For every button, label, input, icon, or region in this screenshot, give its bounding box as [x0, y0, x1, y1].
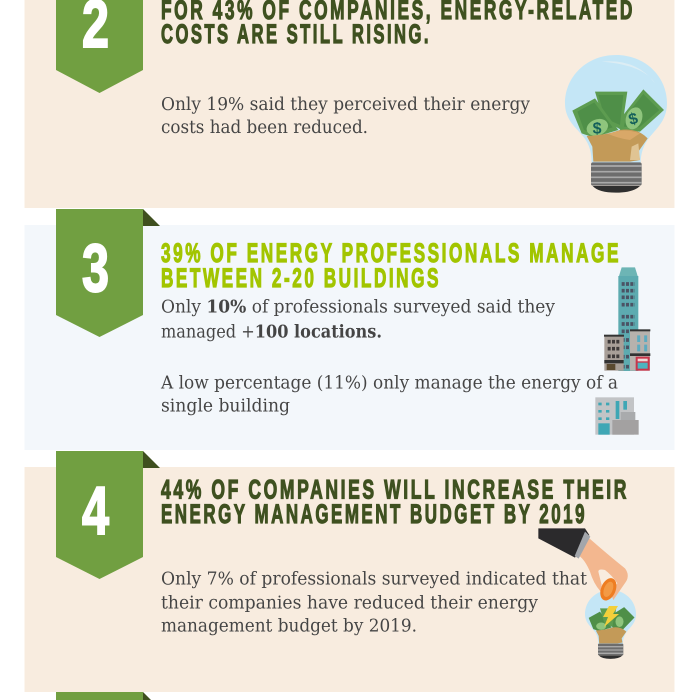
body text: locations: single building: [161, 396, 290, 416]
heading: rising costs: COSTS ARE STILL RISING.: [161, 19, 431, 49]
panel: buildings managed: [24, 209, 674, 450]
ribbon: next section: [56, 692, 160, 700]
body text: locations: [160, 298, 618, 416]
panel: rising costs: [24, 0, 674, 208]
body text: reduced budget: [161, 570, 587, 636]
body text: reduced budget: their companies have reduced their energy: [161, 594, 538, 614]
body text: reduced costs: Only 19% said they perceived their energy: [161, 95, 530, 115]
body text: reduced budget: management budget by 2019.: [161, 616, 417, 636]
heading: buildings managed: [161, 238, 621, 293]
icon: light bulb with money: [565, 55, 667, 193]
body text: reduced budget: Only 7% of professionals surveyed indicated that: [161, 570, 587, 590]
panel: budget: [24, 451, 674, 692]
body text: reduced costs: costs had been reduced.: [161, 118, 368, 138]
ribbon: number 3: 3: [82, 230, 109, 306]
icon: light bulb with money: $: [627, 110, 640, 129]
icon: light bulb with money: $: [593, 120, 602, 137]
heading: buildings managed: BETWEEN 2-20 BUILDINGS: [161, 263, 441, 293]
heading: budget: [161, 474, 629, 529]
ribbon: number 4: [56, 451, 160, 579]
icon: hand dropping coin: [538, 528, 628, 603]
ribbon: number 3: [56, 209, 160, 337]
icon: lightning bolt: [603, 606, 619, 627]
body text: reduced costs: [161, 95, 530, 138]
heading: rising costs: [161, 0, 635, 49]
body text: locations: Only 10% of professionals surveyed said they: [161, 298, 555, 318]
ribbon: number 2: [56, 0, 143, 93]
icon: city buildings: [595, 267, 650, 435]
icon: small bulb with money: [585, 590, 636, 659]
ribbon: number 4: 4: [82, 473, 109, 549]
body text: locations: A low percentage (11%) only manage the energy of a: [160, 374, 618, 394]
body text: locations: managed +100 locations.: [161, 322, 382, 342]
